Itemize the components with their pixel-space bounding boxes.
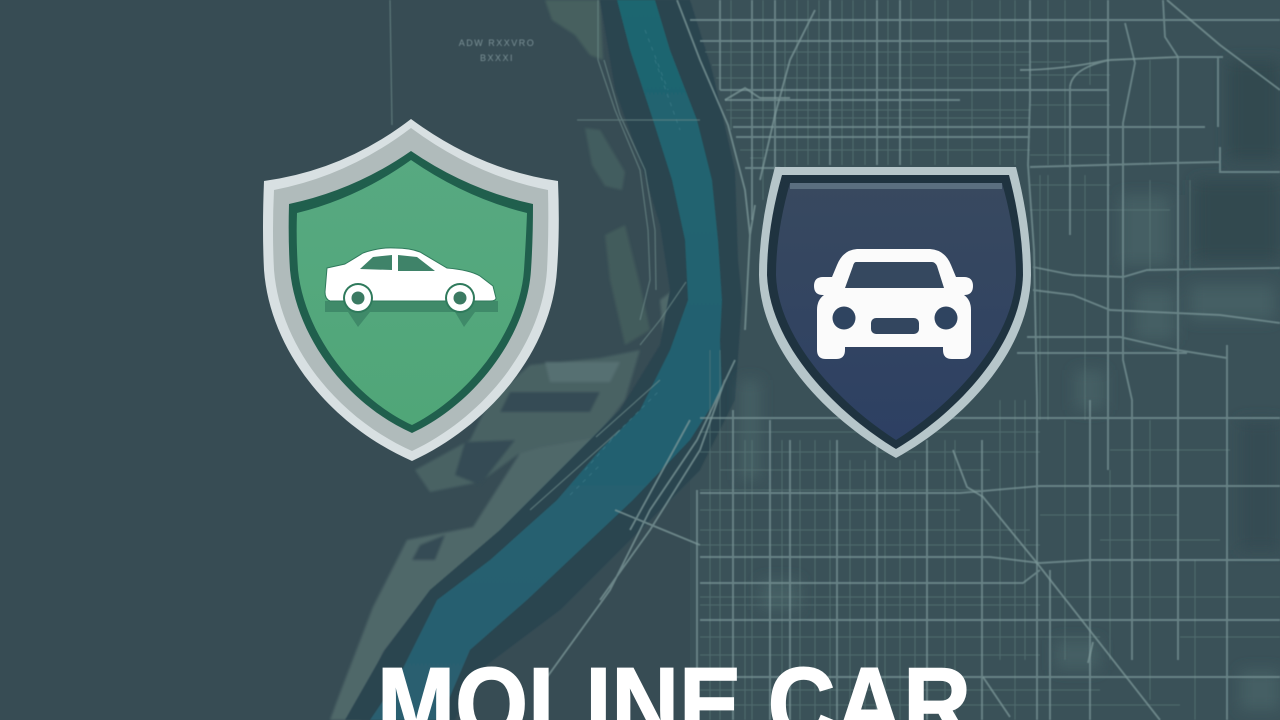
map: city blocks and dark fields <box>740 60 1280 710</box>
map: main streets <box>690 0 1280 720</box>
shield dark outline <box>767 175 1023 449</box>
front-view car <box>814 249 973 359</box>
shield inner band <box>273 128 548 451</box>
shield green face <box>297 160 527 425</box>
small map label: ADW RXXVRO <box>459 38 535 48</box>
shield rim <box>263 119 559 461</box>
shield navy face <box>776 183 1016 440</box>
navy shield icon <box>759 167 1031 458</box>
map: west bank roads <box>390 0 700 510</box>
side-view car <box>325 248 496 313</box>
small map label: BXXXI <box>480 53 514 63</box>
map: land beside the river <box>330 0 680 720</box>
map: minor streets <box>700 0 1280 720</box>
map: curved roads and diagonals <box>545 0 1280 720</box>
shield rim <box>759 167 1031 458</box>
side-view car shadow <box>325 301 498 327</box>
river <box>370 0 722 720</box>
small map label <box>459 38 535 63</box>
map: dark river banks <box>345 0 742 720</box>
green shield icon <box>263 119 559 461</box>
shield dark outline <box>289 151 533 433</box>
map: river ripples <box>570 30 680 495</box>
shield top highlight <box>790 183 1002 189</box>
